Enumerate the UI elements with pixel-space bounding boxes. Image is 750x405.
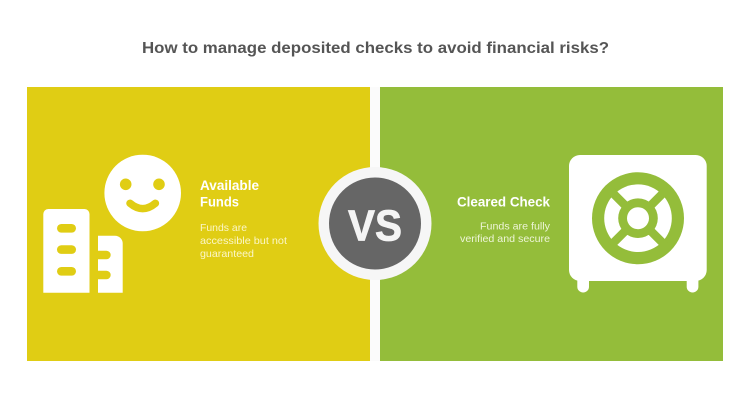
icon: smiley face — [104, 155, 181, 231]
text: available funds description — [200, 222, 287, 260]
panel: available funds: Funds — [200, 195, 239, 210]
icon: safe — [569, 155, 707, 292]
text: available funds description: Funds are — [200, 222, 247, 234]
panel: cleared check — [380, 87, 723, 361]
icon: buildings — [43, 209, 123, 293]
title: How to manage deposited checks to avoid financial risks? — [142, 40, 609, 57]
vs label: VS — [348, 202, 402, 250]
heading: cleared check: Cleared Check — [457, 195, 550, 210]
text: available funds description: guaranteed — [200, 248, 254, 260]
panel: available funds — [27, 87, 370, 361]
text: cleared check description: verified and secure — [460, 233, 550, 245]
text: cleared check description — [460, 220, 551, 245]
center divider — [370, 87, 380, 361]
heading: available funds: Available — [200, 178, 259, 193]
text: cleared check description: Funds are fully — [480, 220, 551, 232]
vs badge — [318, 167, 432, 280]
text: available funds description: accessible but not — [200, 235, 287, 247]
